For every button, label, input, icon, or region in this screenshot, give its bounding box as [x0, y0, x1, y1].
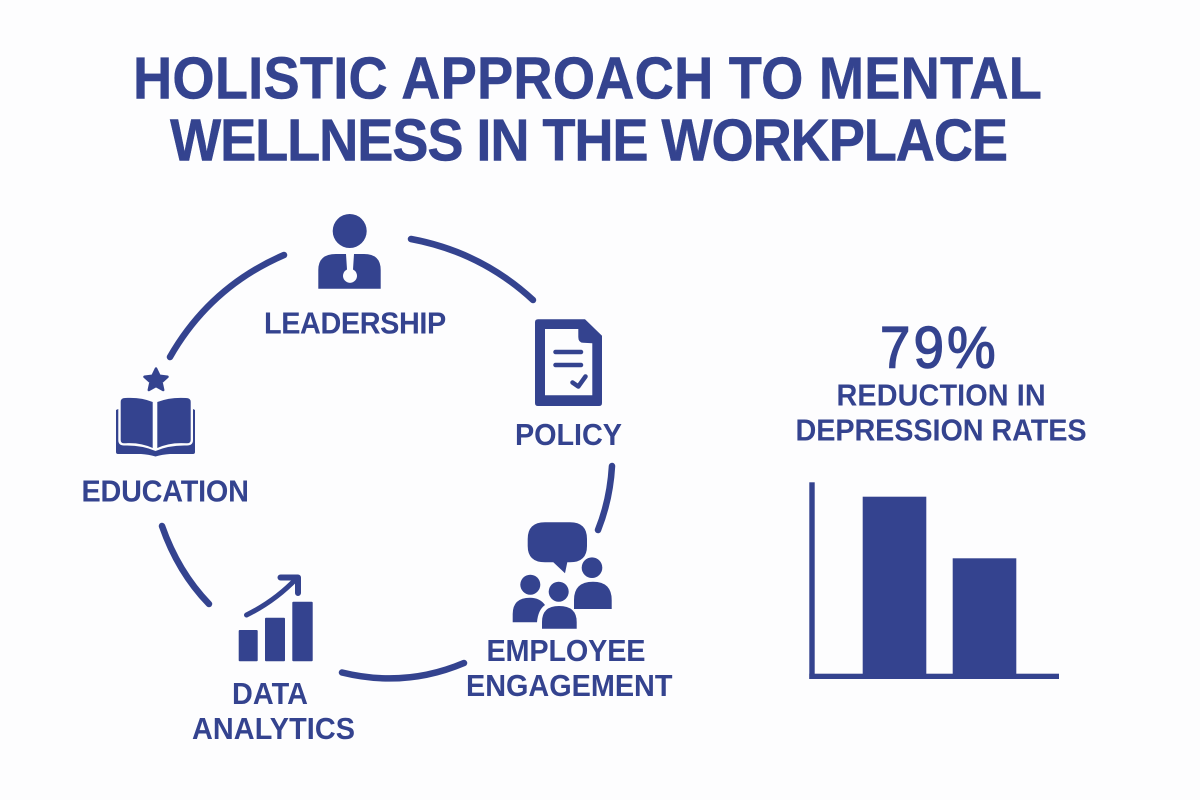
arc: policy to employee engagement — [598, 466, 612, 530]
label: data analytics — [192, 677, 355, 746]
title: WELLNESS IN THE WORKPLACE — [170, 109, 1008, 174]
stat caption: DEPRESSION RATES — [796, 414, 1087, 448]
label: leadership: LEADERSHIP — [264, 306, 446, 341]
label: policy: POLICY — [515, 418, 622, 452]
statistic panel — [796, 315, 1087, 679]
arc: employee engagement to data analytics — [342, 663, 464, 678]
arc: data analytics to education — [162, 526, 209, 604]
label: employee engagement: ENGAGEMENT — [466, 669, 672, 703]
title: HOLISTIC APPROACH TO MENTAL — [133, 47, 1042, 112]
icon: data analytics chart — [239, 578, 313, 661]
icon: policy document — [535, 319, 602, 406]
icon: employee engagement group — [513, 522, 612, 629]
cycle diagram — [82, 214, 672, 746]
title — [133, 47, 1042, 174]
bar chart — [809, 482, 1059, 679]
label: data analytics: DATA — [232, 677, 308, 711]
icon: leader — [318, 214, 381, 289]
label: education: EDUCATION — [82, 475, 249, 509]
label: employee engagement: EMPLOYEE — [486, 634, 646, 668]
label: employee engagement — [466, 634, 672, 703]
stat caption: REDUCTION IN — [836, 378, 1046, 413]
icon: book with star — [116, 368, 195, 456]
stat caption — [796, 378, 1087, 448]
arc: education to leadership — [170, 255, 284, 357]
arc: leadership to policy — [411, 239, 533, 300]
stat: 79%: 79% — [880, 315, 996, 380]
label: data analytics: ANALYTICS — [192, 712, 355, 746]
